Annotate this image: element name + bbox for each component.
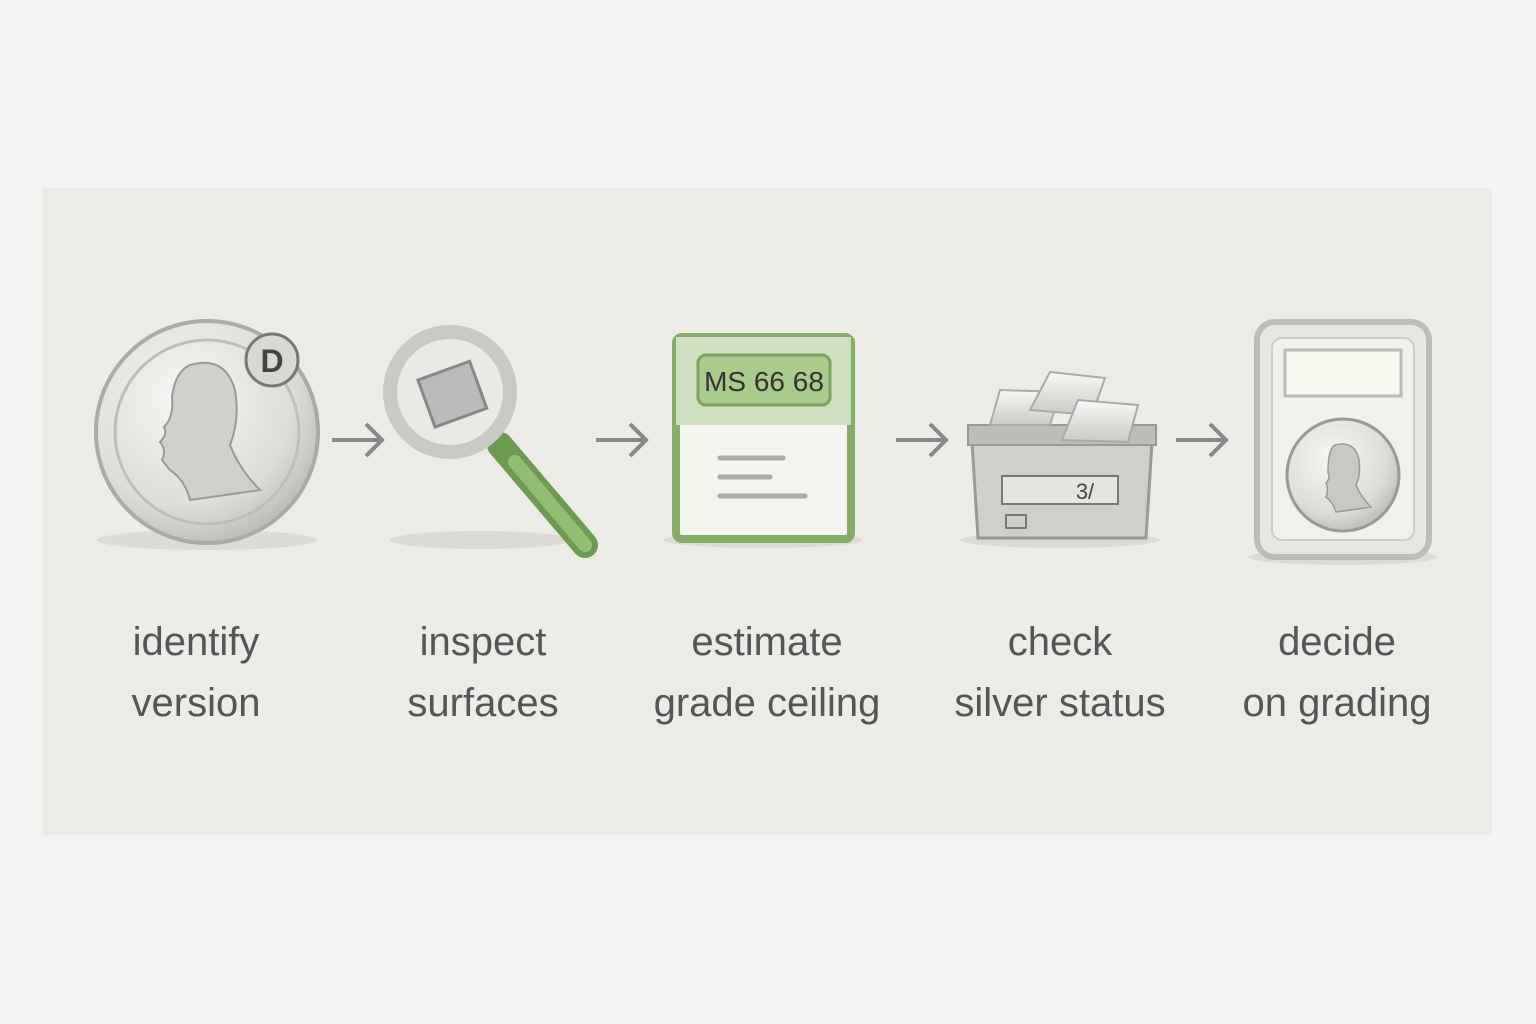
- icon: coin with D mint mark: [96, 321, 318, 550]
- arrow 4: [1176, 424, 1226, 456]
- icon: grade estimate card MS 66 68: [663, 337, 863, 548]
- label: identify version: identify: [133, 620, 259, 664]
- label: decide on grading: on grading: [1242, 681, 1432, 725]
- label: check silver status: check: [1008, 620, 1112, 664]
- label: decide on grading: decide: [1278, 620, 1396, 664]
- label: inspect surfaces: surfaces: [407, 681, 559, 725]
- icon: grade estimate card MS 66 68: MS 66 68: [704, 366, 824, 397]
- arrow 1: [332, 424, 382, 456]
- label: check silver status: silver status: [954, 681, 1166, 725]
- icon: scale with silver bars: 3/: [1076, 479, 1095, 504]
- arrow 2: [596, 424, 646, 456]
- icon: magnifying glass: [390, 332, 585, 549]
- label: check silver status: [954, 620, 1166, 725]
- icon: scale with silver bars: [960, 372, 1160, 548]
- label: estimate grade ceiling: [654, 620, 880, 725]
- label: identify version: [132, 620, 260, 725]
- label: decide on grading: [1242, 620, 1432, 725]
- label: inspect surfaces: inspect: [420, 620, 546, 664]
- label: estimate grade ceiling: estimate: [691, 620, 843, 664]
- label: identify version: version: [132, 681, 260, 725]
- label: estimate grade ceiling: grade ceiling: [654, 681, 880, 725]
- panel: process background: [42, 188, 1492, 835]
- label: inspect surfaces: [407, 620, 559, 725]
- arrow 3: [896, 424, 946, 456]
- icon: coin with D mint mark: D: [260, 343, 284, 379]
- icon: graded slab with coin: [1248, 322, 1438, 565]
